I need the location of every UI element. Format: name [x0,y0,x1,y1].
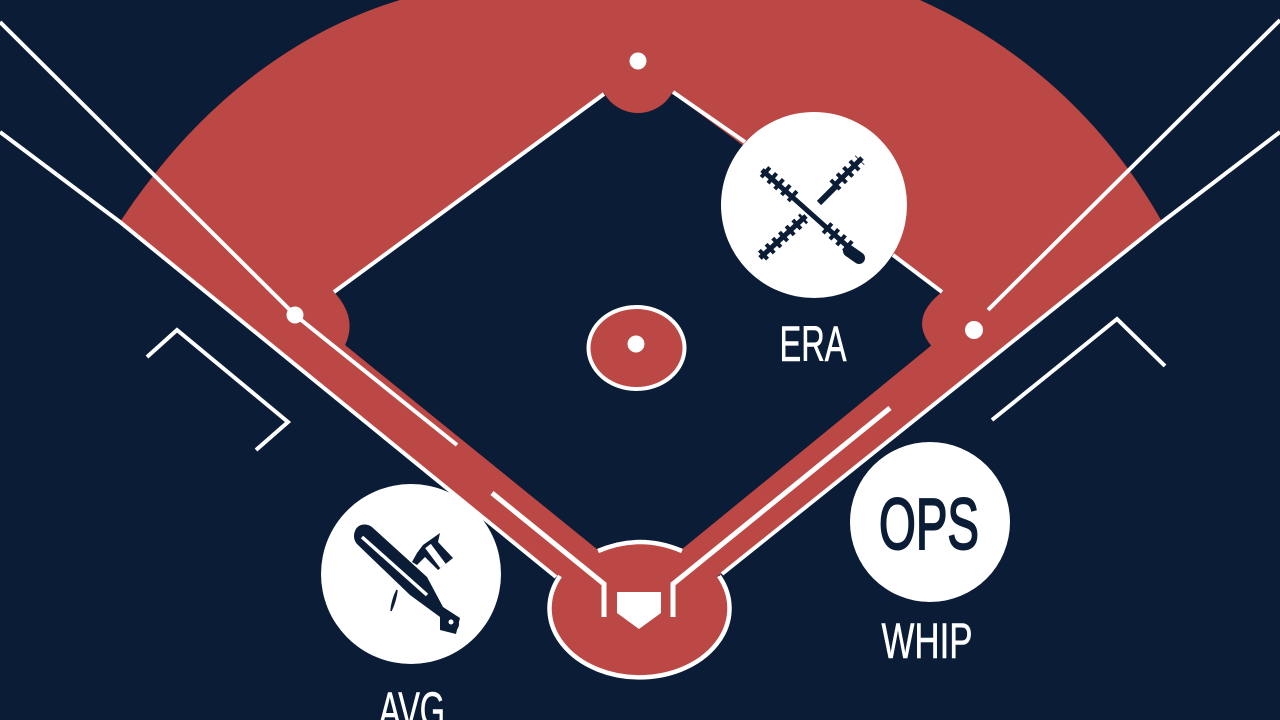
home plate circle [492,408,890,677]
first base circle [922,280,1000,350]
home plate [617,592,661,629]
ERA label: ERA [780,316,847,372]
outfield arc and foul-line strips [120,0,1162,600]
infield dark diamond [334,68,942,550]
icon: bat and ball [354,525,460,634]
decorative bracket: left [147,330,288,450]
OPS badge: OPS [879,485,979,565]
decorative bracket: right [992,319,1165,420]
icon: crossed bats [760,158,862,258]
second base circle [599,35,677,113]
WHIP label: WHIP [882,613,972,669]
ERA badge [721,112,907,298]
pitcher's mound [588,307,684,389]
third base circle [286,290,350,345]
OPS badge [850,442,1010,602]
AVG badge [321,484,501,664]
infield white lines [334,92,942,292]
foul lines [0,20,1280,577]
